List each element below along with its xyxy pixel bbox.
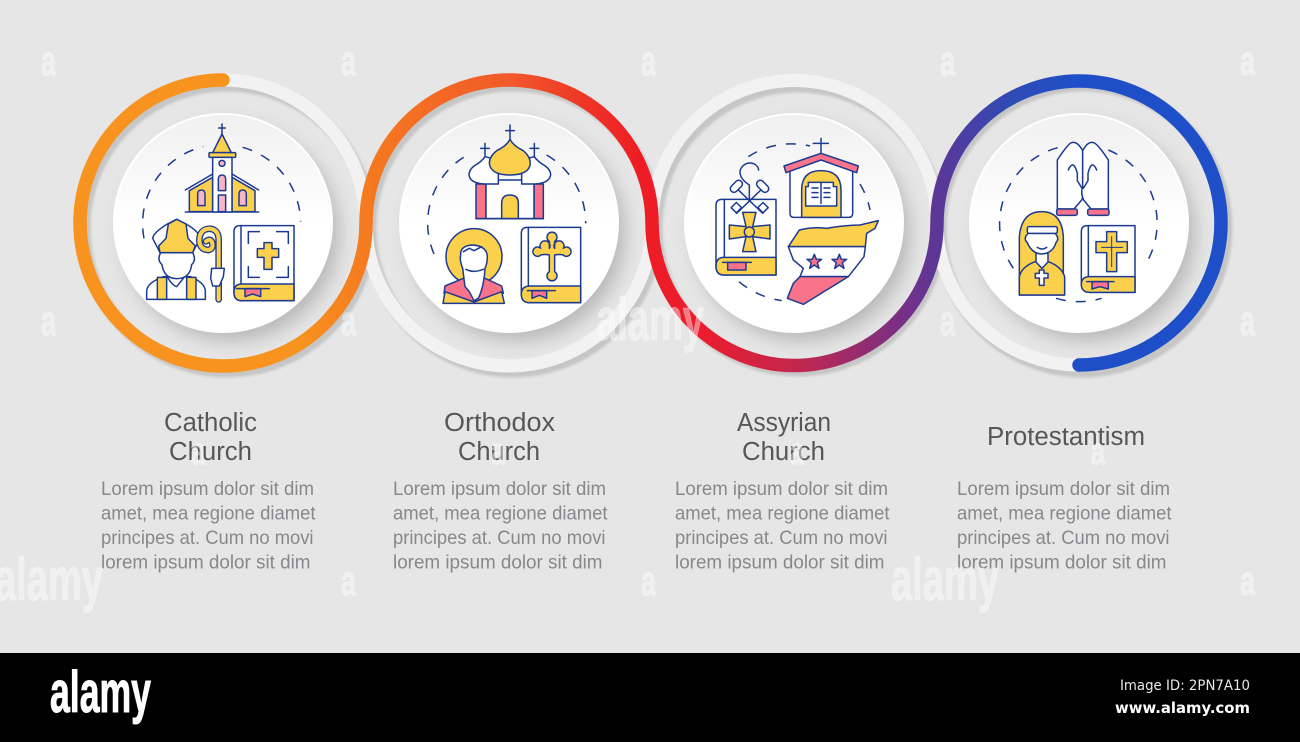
ring shadows xyxy=(84,85,1226,371)
watermarks: a xyxy=(940,297,955,344)
text block: catholic church: Lorem ipsum dolor sit dim xyxy=(101,478,314,500)
heading: catholic church xyxy=(164,409,257,466)
disc: orthodox xyxy=(400,114,618,332)
watermarks: a xyxy=(1240,297,1255,344)
watermarks: a xyxy=(641,37,656,84)
footer bar: Image ID: 2PN7A10 xyxy=(1120,678,1250,694)
heading: assyrian church: Assyrian xyxy=(737,409,831,437)
icon: protestant hands, nun and bible xyxy=(1000,142,1157,302)
watermarks: a xyxy=(191,431,206,473)
text block: protestantism xyxy=(957,478,1172,574)
watermarks: a xyxy=(1091,431,1106,473)
heading: assyrian church xyxy=(737,409,831,466)
icon: assyrian church, book and map xyxy=(716,138,878,304)
footer bar: alamy xyxy=(50,660,151,725)
disc: protestantism xyxy=(970,114,1188,332)
footer bar: www.alamy.com xyxy=(1115,699,1250,717)
text block: catholic church: lorem ipsum dolor sit dim xyxy=(101,552,310,574)
watermarks: a xyxy=(790,431,805,473)
watermarks xyxy=(0,37,1255,613)
watermarks: a xyxy=(341,37,356,84)
text block: catholic church xyxy=(101,478,316,574)
watermarks: a xyxy=(341,297,356,344)
footer bar xyxy=(0,653,1300,742)
watermarks: alamy xyxy=(0,546,103,613)
disc shadows xyxy=(123,125,1195,341)
text block: catholic church: amet, mea regione diamet xyxy=(101,502,316,524)
heading: catholic church: Catholic xyxy=(164,409,257,437)
disc: assyrian xyxy=(685,114,903,332)
heading: protestantism: Protestantism xyxy=(987,423,1145,451)
text block: orthodox church: principes at. Cum no movi xyxy=(393,527,606,549)
text block: assyrian church: amet, mea regione diamet xyxy=(675,502,890,524)
watermarks: alamy xyxy=(891,546,999,613)
text block: protestantism: amet, mea regione diamet xyxy=(957,502,1172,524)
heading: orthodox church: Orthodox xyxy=(444,409,555,437)
watermarks: a xyxy=(491,431,506,473)
text block: assyrian church xyxy=(675,478,890,574)
text block: protestantism: lorem ipsum dolor sit dim xyxy=(957,552,1166,574)
text block: assyrian church: lorem ipsum dolor sit dim xyxy=(675,552,884,574)
disc: catholic xyxy=(114,114,332,332)
watermarks: a xyxy=(940,37,955,84)
watermarks: a xyxy=(41,297,56,344)
text block: orthodox church xyxy=(393,478,608,574)
heading: assyrian church: Church xyxy=(742,438,825,466)
heading: orthodox church xyxy=(444,409,555,466)
gradient ribbon xyxy=(80,80,1221,366)
text block: protestantism: Lorem ipsum dolor sit dim xyxy=(957,478,1170,500)
text block: orthodox church: Lorem ipsum dolor sit dim xyxy=(393,478,606,500)
watermarks: a xyxy=(641,557,656,604)
heading: orthodox church: Church xyxy=(458,438,540,466)
watermarks: alamy xyxy=(596,286,704,353)
ghost ring segments xyxy=(223,80,1079,366)
icon: catholic church, bishop and bible xyxy=(143,124,301,301)
watermarks: a xyxy=(41,37,56,84)
icon: orthodox church, saint and bible xyxy=(428,125,586,303)
text block: assyrian church: Lorem ipsum dolor sit dim xyxy=(675,478,888,500)
text block: assyrian church: principes at. Cum no movi xyxy=(675,527,888,549)
text block: orthodox church: lorem ipsum dolor sit dim xyxy=(393,552,602,574)
watermarks: a xyxy=(1240,557,1255,604)
watermarks: a xyxy=(1240,37,1255,84)
text block: catholic church: principes at. Cum no movi xyxy=(101,527,314,549)
text block: orthodox church: amet, mea regione diamet xyxy=(393,502,608,524)
text block: protestantism: principes at. Cum no movi xyxy=(957,527,1170,549)
watermarks: a xyxy=(341,557,356,604)
heading: catholic church: Church xyxy=(169,438,252,466)
